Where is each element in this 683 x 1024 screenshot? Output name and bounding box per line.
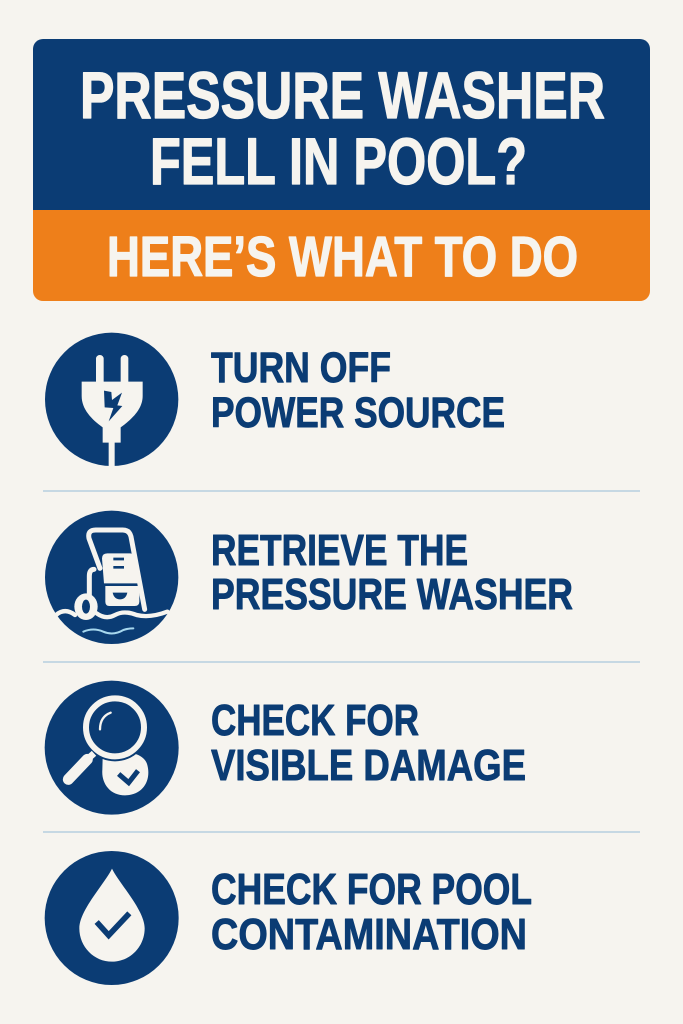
icon: water drop with check (45, 851, 179, 985)
step 2 label (211, 526, 573, 619)
banner: navy title panel (33, 39, 650, 210)
step 3 label (211, 696, 526, 790)
step 3 label: VISIBLE DAMAGE (211, 741, 526, 790)
subtitle: HERE’S WHAT TO DO (107, 225, 578, 289)
step 4 label: CONTAMINATION (211, 910, 527, 959)
icon: pressure washer in water (45, 511, 178, 644)
step 4 label: CHECK FOR POOL (211, 865, 532, 914)
step 1 label: TURN OFF (211, 344, 391, 392)
title (80, 58, 605, 198)
banner: orange subtitle panel (33, 210, 650, 301)
step 2 label: RETRIEVE THE (211, 526, 468, 575)
step 2: retrieve the pressure washer (45, 511, 573, 644)
step 3 label: CHECK FOR (211, 696, 419, 745)
header banner (33, 39, 650, 301)
step 4 label (211, 865, 532, 959)
step 1 label: POWER SOURCE (211, 389, 505, 437)
step 1: turn off power source (45, 333, 505, 466)
step 1 label (211, 344, 505, 437)
step 3: check for visible damage (45, 681, 526, 815)
step 2 label: PRESSURE WASHER (211, 570, 573, 619)
icon: plug (45, 333, 178, 466)
icon: magnifying glass with check (45, 681, 179, 815)
title: FELL IN POOL? (150, 124, 527, 198)
step 4: check for pool contamination (45, 851, 532, 985)
